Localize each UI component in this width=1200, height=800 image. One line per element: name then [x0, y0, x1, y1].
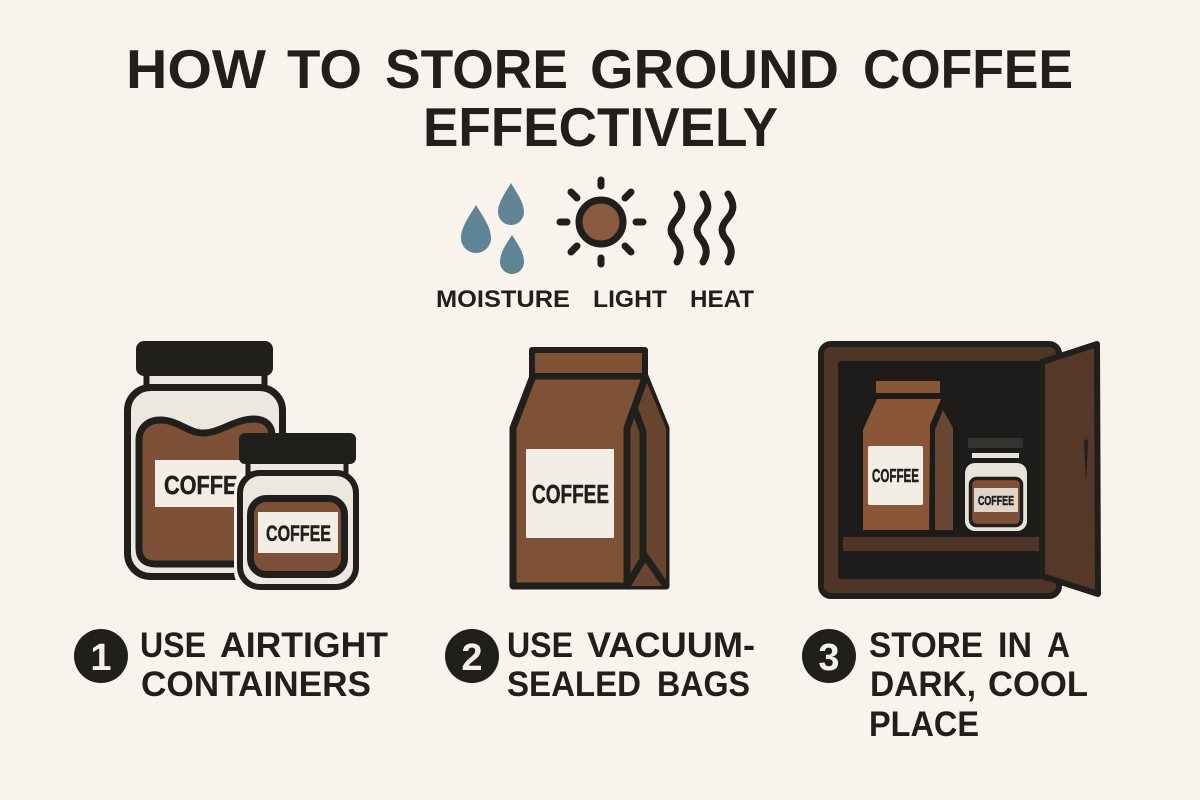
small jar: COFFEE — [266, 521, 331, 546]
step 1 caption: CONTAINERS — [141, 665, 371, 704]
cabinet interior — [838, 361, 1044, 579]
large jar — [128, 341, 282, 576]
title: STORE — [385, 38, 568, 100]
bag inside cabinet: COFFEE — [872, 466, 919, 486]
step 3 caption: IN — [998, 626, 1032, 665]
step 3 caption: STORE — [869, 626, 983, 665]
step 1 caption: USE — [140, 626, 206, 665]
icon: airtight jars — [128, 341, 364, 595]
label: heat: HEAT — [690, 286, 754, 313]
step 3 caption — [802, 626, 1088, 744]
title: HOW — [126, 38, 266, 100]
title: EFFECTIVELY — [423, 96, 778, 158]
open door — [1042, 344, 1098, 594]
step 2 caption: VACUUM- — [587, 626, 755, 665]
label: moisture: MOISTURE — [436, 286, 570, 313]
jar inside cabinet — [965, 438, 1027, 531]
title: TO — [287, 38, 362, 100]
shelf — [843, 537, 1039, 551]
cabinet frame — [821, 344, 1059, 596]
icon: heat waves — [671, 194, 733, 262]
badge 2: 2 — [461, 637, 483, 679]
step 2 caption — [445, 626, 755, 704]
title — [126, 38, 1073, 158]
step 1 caption — [74, 626, 388, 704]
icon: dark cabinet — [821, 344, 1098, 596]
step 3 caption: PLACE — [869, 705, 979, 744]
badge 1: 1 — [90, 637, 112, 679]
title: COFFEE — [863, 38, 1073, 100]
step 1 caption: AIRTIGHT — [220, 626, 388, 665]
badge 2 — [445, 629, 499, 683]
step 2 caption: USE — [507, 626, 573, 665]
icon: vacuum-sealed bag — [513, 350, 666, 586]
bag inside cabinet — [863, 381, 953, 530]
icon: sun — [560, 180, 643, 264]
icon: moisture drops — [461, 183, 524, 274]
step 2 caption: SEALED — [507, 665, 641, 704]
large jar: COFFEE — [164, 470, 252, 500]
small jar — [234, 433, 364, 595]
label: light: LIGHT — [593, 286, 667, 313]
title: GROUND — [590, 38, 839, 100]
icon: vacuum-sealed bag: COFFEE — [532, 479, 609, 509]
badge 3 — [802, 629, 856, 683]
badge 1 — [74, 629, 128, 683]
badge 3: 3 — [818, 637, 840, 679]
step 3 caption: COOL — [988, 665, 1088, 704]
step 3 caption: A — [1047, 626, 1070, 665]
step 3 caption: DARK, — [870, 665, 976, 704]
step 2 caption: BAGS — [657, 665, 750, 704]
jar inside cabinet: COFFEE — [978, 493, 1014, 508]
